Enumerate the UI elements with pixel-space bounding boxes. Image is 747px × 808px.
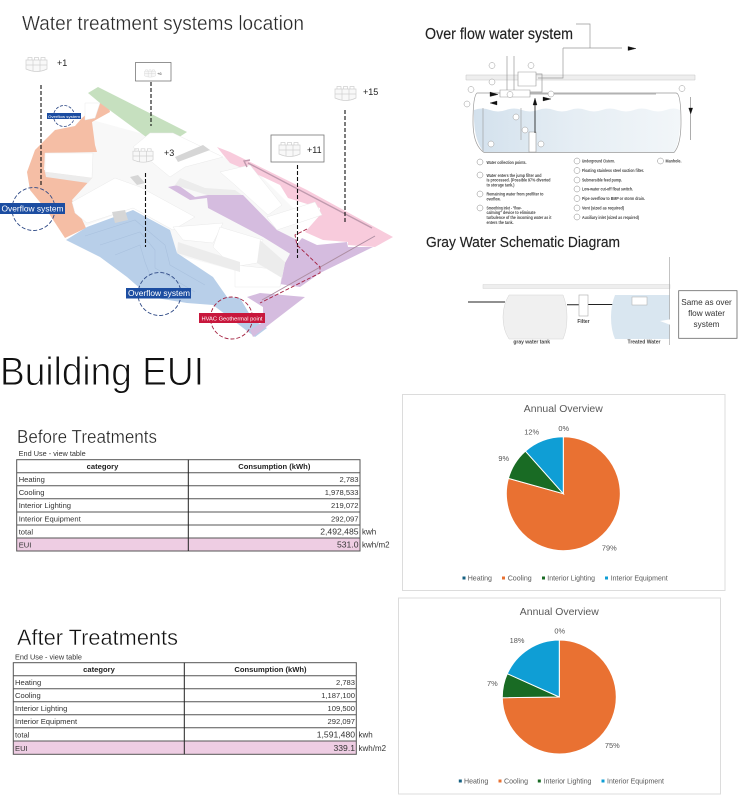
table: before treatments [17,451,390,551]
table: before treatments: 219,072 [331,501,358,510]
HVAC geothermal callout [199,229,320,339]
table: after treatments: kwh [358,730,373,740]
table: before treatments: category [87,462,119,471]
dashed level lines [41,82,345,258]
panel: after treatments pie chart: Cooling [504,776,528,786]
table: before treatments: kwh/m2 [362,540,390,550]
zone: pink area [217,147,393,247]
building facade shading [45,172,285,278]
legend middle column: Underground Cistern. [582,158,615,164]
table: after treatments: category [83,665,116,674]
panel: after treatments pie chart: Interior Lighting [544,776,591,786]
legend left column: turbulence of the incoming water as it [486,215,552,220]
heading: gray water schematic diagram: Gray Water Schematic Diagram [426,234,620,251]
table: before treatments: 531.0 [337,540,359,550]
purple zone line [262,236,375,300]
legend left column: is processed. (Possible 97% diverted [486,178,551,182]
table: after treatments: 1,591,480 [317,730,355,740]
overflow callout bottom: Overflow system [128,289,190,298]
table: after treatments: Cooling [15,691,41,700]
title: water treatment systems location: Water treatment systems location [22,13,304,35]
table: after treatments: kwh/m2 [358,744,387,753]
cistern water [474,108,680,152]
pink zone arrow [244,160,372,228]
connecting pipes [468,302,613,305]
diagram number markers [464,62,685,147]
heading: after treatments: After Treatments [17,625,178,650]
table: before treatments: Interior Lighting [19,501,71,510]
building base massing [45,118,300,285]
panel: after treatments pie chart: 18% [510,636,525,645]
panel: before treatments pie chart: 0% [558,424,569,433]
panel: before treatments pie chart: Cooling [508,574,532,582]
table: before treatments: kwh [362,528,376,536]
ground strip [483,284,670,288]
legend middle column: Low-water cut-off float switch. [582,186,633,192]
table: before treatments: 1,978,533 [325,488,358,497]
table: before treatments: total [19,528,33,536]
table: before treatments: Heating [19,475,45,484]
table: after treatments: 1,187,100 [321,691,355,700]
tank marker +3 [133,148,174,162]
table: before treatments: Cooling [19,488,44,497]
legend left column: calming" device to eliminate [486,210,536,215]
white building roofs [45,103,322,287]
tank marker +1: +1 [57,58,67,68]
flow arrows [490,46,693,140]
table: after treatments: End Use - view table [15,654,82,661]
legend left column: Water collection points. [486,160,526,165]
ground strip [466,75,695,80]
gray roof patches [112,145,210,223]
callout: same as over flow water system: system [694,320,720,329]
legend middle column: Submersible feed pump. [582,178,622,182]
zone: purple area east [273,238,373,287]
table: after treatments [13,654,387,754]
overflow callout left: Overflow system [2,204,64,214]
callout: same as over flow water system: Same as over [681,298,732,307]
panel: after treatments pie chart: 75% [605,741,620,750]
HVAC geothermal callout: HVAC Geothermal point [202,316,263,322]
legend middle column [574,158,645,220]
heading: building EUI: Building EUI [0,350,204,394]
table: after treatments: 292,097 [328,717,355,726]
overflow callout small: Overflow system [48,114,81,119]
table: after treatments: 339.1 [333,743,355,753]
panel: before treatments pie chart: Interior Lighting [547,574,595,582]
legend middle column: Vent (sized as required) [582,206,625,210]
table: after treatments: total [15,730,30,740]
tank marker +11 in box [271,135,324,162]
tank marker +15 [335,86,378,100]
heading: over flow water system: Over flow water system [425,26,573,43]
tank marker +11 in box: +11 [307,145,322,155]
panel: after treatments pie chart: Heating [464,776,488,786]
panel: after treatments pie chart: Interior Equipment [607,776,664,786]
underground cistern [473,93,681,152]
legend left column: Smoothing inlet - "flow- [486,206,522,210]
table: before treatments: 2,783 [339,475,358,484]
table: before treatments: End Use - view table [19,451,86,458]
tank marker +6 in box: +6 [157,71,162,76]
panel: before treatments pie chart: Heating [468,574,492,582]
overflow callout bottom [126,272,191,316]
overflow water system diagram [464,24,695,225]
zone: blue landscape area [66,210,267,337]
zone: purple band [168,185,297,258]
zone: green roof area [88,87,187,145]
vertical section line [668,257,670,345]
manhole and filter [483,72,536,152]
heading: before treatments: Before Treatments [17,426,157,447]
panel: before treatments pie chart: 9% [498,454,509,463]
tank marker +6 in box [136,62,171,81]
legend right column [658,158,682,164]
gray water tank [503,295,567,339]
treated water tank [611,295,670,339]
overflow callout left [0,188,65,230]
legend middle column: Pipe overflow to BMP or storm drain. [582,196,645,201]
table: after treatments: Interior Lighting [15,704,67,713]
table: before treatments: EUI [19,540,31,550]
legend left column: Remaining water from prefilter to [486,192,544,196]
overflow callout small [47,106,81,126]
legend left column: enters the tank. [486,220,514,225]
tank marker +1 [26,58,67,72]
treated tank hatch [632,297,647,305]
callout: same as over flow water system: flow water [688,309,725,318]
panel: before treatments pie chart [402,394,725,590]
legend left column [477,159,552,225]
filter label: Filter [577,319,590,325]
pipes [504,24,656,94]
table: after treatments: Interior Equipment [15,717,78,726]
panel: before treatments pie chart: 12% [524,428,540,437]
zone: lower purple area [247,293,305,337]
panel: after treatments pie chart: 7% [487,679,498,688]
panel: before treatments pie chart: Interior Equipment [611,574,668,582]
table: before treatments: 2,492,485 [320,526,359,536]
treated water label: Treated Water [628,340,660,346]
tank marker +3: +3 [164,148,174,158]
legend left column: overflow. [486,196,500,202]
table: after treatments: 109,500 [328,704,355,713]
panel: after treatments pie chart [398,598,720,794]
table: after treatments: Consumption (kWh) [234,665,307,674]
zone: orange overflow area [27,103,110,238]
legend right column: Manhole. [666,158,682,164]
panel: after treatments pie chart: 0% [554,626,565,636]
panel: after treatments pie chart: Annual Overview [520,606,599,618]
table: after treatments: Heating [15,678,41,687]
callout: same as over flow water system [660,291,737,338]
filter [579,295,588,316]
legend left column: Water enters the jump filter and [486,173,542,178]
gray water tank label: gray water tank [513,340,550,346]
gray water schematic [468,257,737,346]
tank marker +15: +15 [363,87,378,97]
table: before treatments: Consumption (kWh) [238,462,311,471]
table: after treatments: EUI [15,744,28,753]
table: before treatments: 292,097 [331,514,358,524]
panel: before treatments pie chart: Annual Overview [524,403,603,415]
table: after treatments: 2,783 [336,678,355,687]
table: before treatments: Interior Equipment [19,514,82,524]
legend middle column: Floating stainless steel suction filter. [582,168,644,173]
legend middle column: Auxiliary inlet (sized as required) [582,215,640,220]
building axonometric map [0,58,393,339]
blue zone contour lines [85,220,205,292]
legend left column: to storage tank.) [486,182,515,188]
panel: before treatments pie chart: 79% [602,544,617,553]
